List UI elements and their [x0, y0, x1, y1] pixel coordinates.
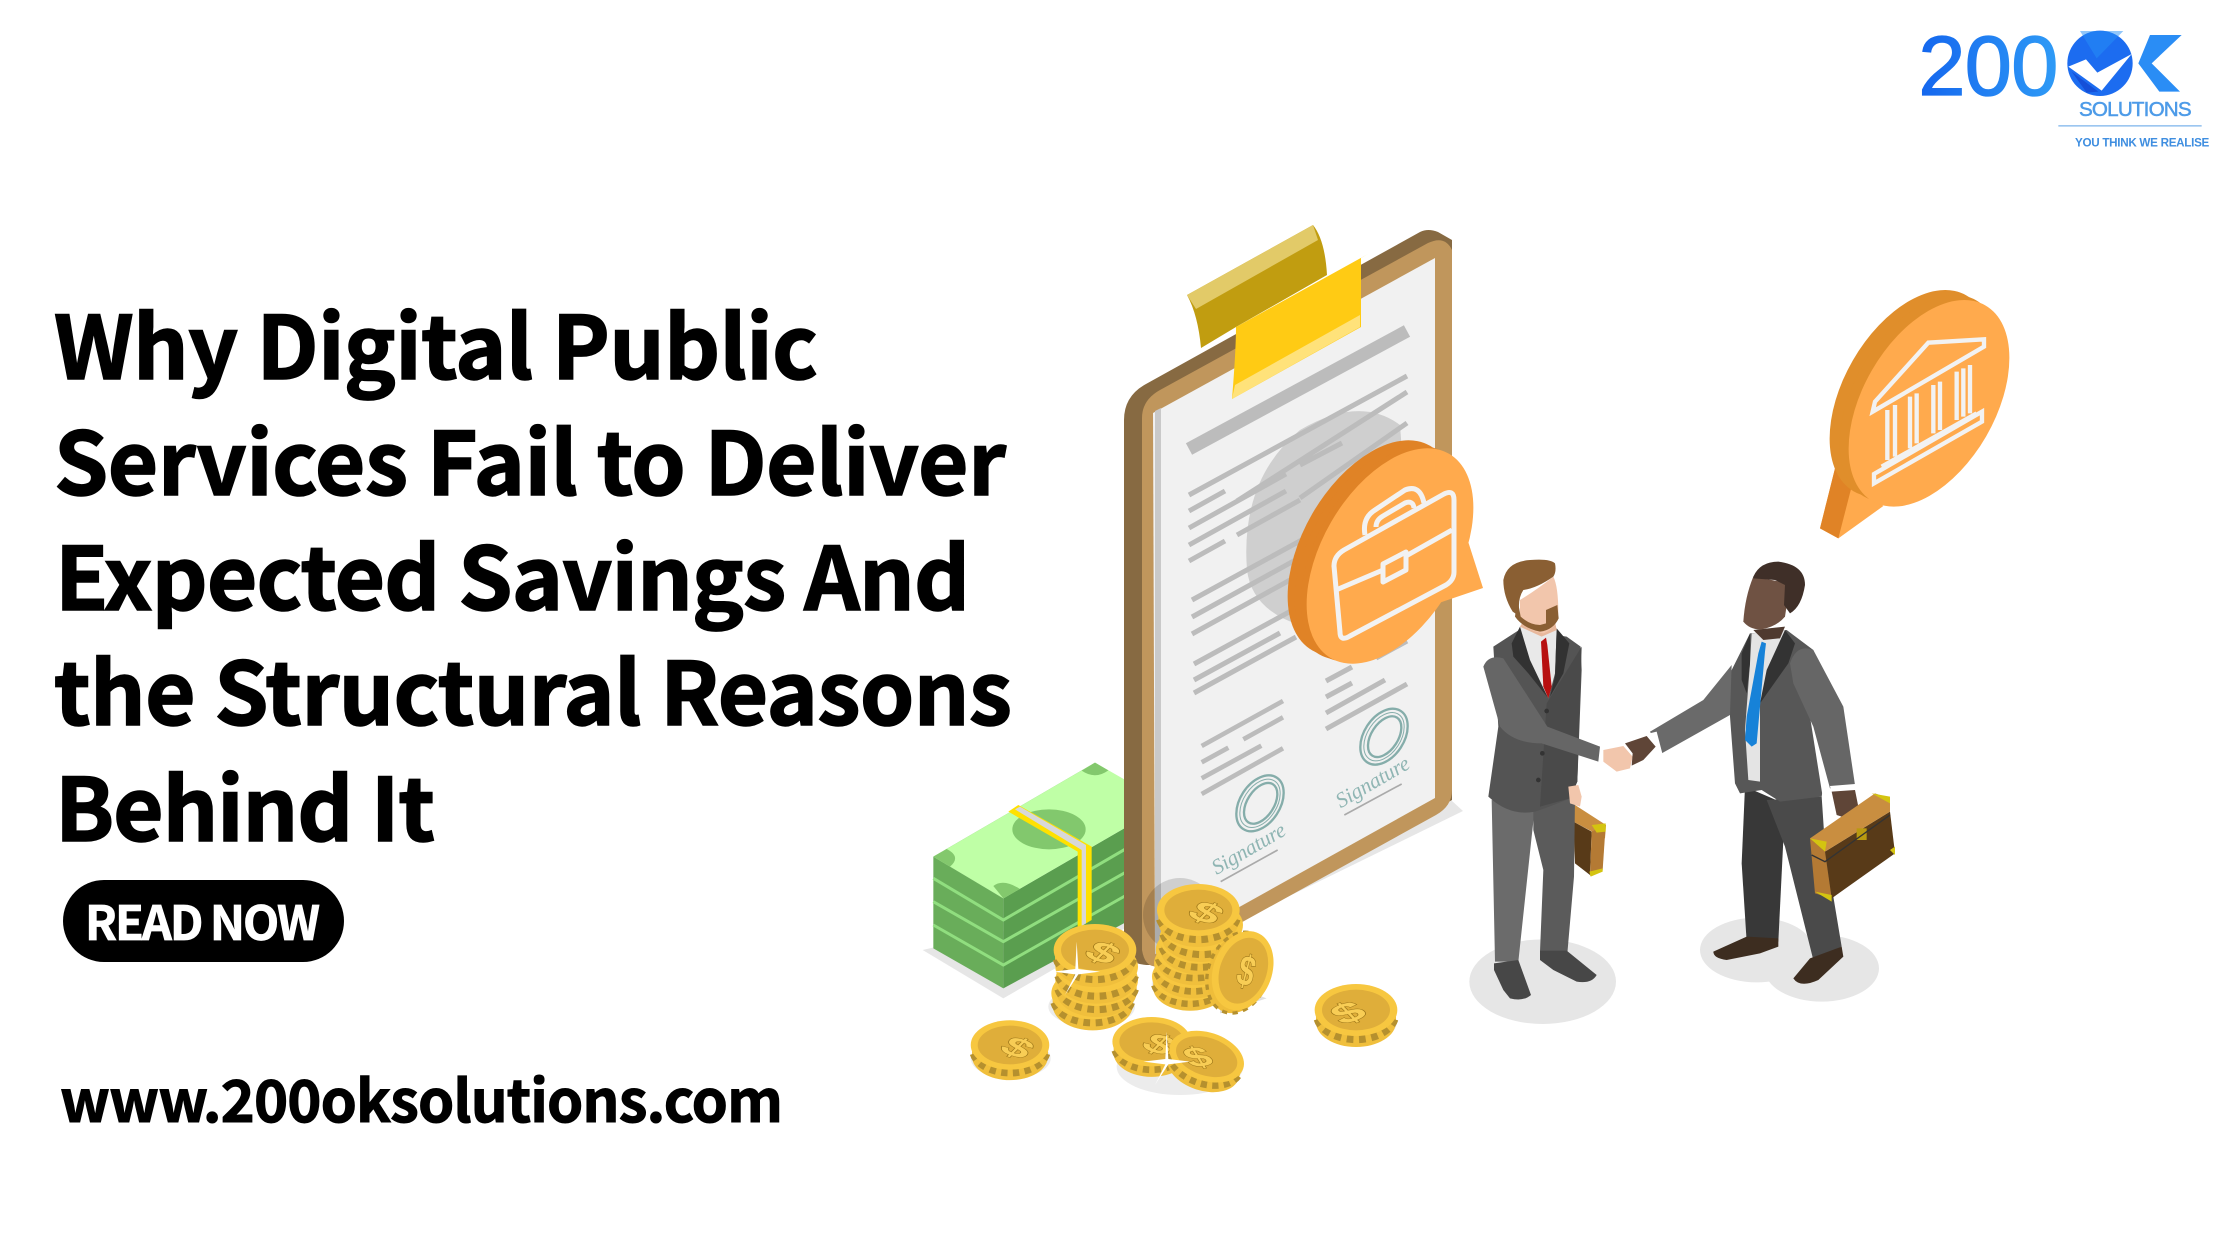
- illustration: cash stack: [923, 763, 1133, 998]
- man right: [1625, 562, 1895, 1002]
- logo wordmark 200: 200: [1918, 18, 2058, 113]
- coin flat 1: $: [992, 1030, 1043, 1065]
- title: [54, 279, 1012, 867]
- coin stack right: [1152, 884, 1243, 1011]
- logo K: [2138, 35, 2182, 92]
- signature block: Signature: [1331, 751, 1414, 813]
- speech bubble: briefcase: [1253, 412, 1508, 692]
- coin flat 4: [1159, 1022, 1251, 1101]
- briefcase left: [1570, 805, 1606, 877]
- title: the Structural Reasons: [54, 625, 1012, 751]
- logo solutions: SOLUTIONS: [2079, 98, 2192, 121]
- businessmen shaking hands: [1469, 560, 1895, 1024]
- logo: [1918, 18, 2210, 150]
- title: Why Digital Public: [54, 279, 818, 405]
- read now button: READ NOW: [85, 885, 320, 954]
- title: Behind It: [55, 741, 435, 867]
- coin flat 3: $: [1134, 1027, 1185, 1061]
- coin stack right: $: [1180, 895, 1232, 931]
- coin stack left: [1051, 924, 1138, 1030]
- signature block: Signature: [1207, 818, 1290, 879]
- signature block: [1202, 700, 1417, 882]
- title: Services Fail to Deliver: [54, 395, 1007, 521]
- man left: [1469, 560, 1633, 1024]
- website url: www.200oksolutions.com: [60, 1055, 783, 1139]
- bank icon: [1873, 339, 1984, 483]
- coins: [971, 884, 1397, 1101]
- money band: [1008, 805, 1092, 928]
- coin flat 1: [971, 1020, 1049, 1080]
- coin flat 2: [1315, 984, 1397, 1047]
- coin shadow on clipboard: [1143, 878, 1217, 952]
- briefcase icon: [1334, 489, 1454, 638]
- coin flat 4: $: [1177, 1041, 1220, 1074]
- bubble shadow: [1246, 411, 1410, 625]
- clipboard shadow: [1220, 790, 1463, 930]
- paper clip: [1187, 225, 1368, 399]
- clipboard: [1124, 230, 1463, 966]
- logo tagline: YOU THINK WE REALISE: [2075, 137, 2210, 150]
- upright coin: $: [1232, 946, 1261, 996]
- coin flat 3: [1112, 1017, 1191, 1077]
- document text lines: [1189, 331, 1407, 729]
- briefcase right: [1810, 793, 1895, 902]
- sparkle: [1143, 1032, 1190, 1085]
- coin flat 2: $: [1322, 995, 1375, 1031]
- coin ground shadows: [971, 965, 1397, 1095]
- paper: [1153, 258, 1435, 954]
- speech bubble: government building: [1796, 262, 2043, 538]
- title: Expected Savings And: [55, 510, 970, 636]
- coin stack left: $: [1076, 935, 1129, 971]
- logo check circle: [2067, 31, 2133, 96]
- upright coin: [1196, 922, 1284, 1022]
